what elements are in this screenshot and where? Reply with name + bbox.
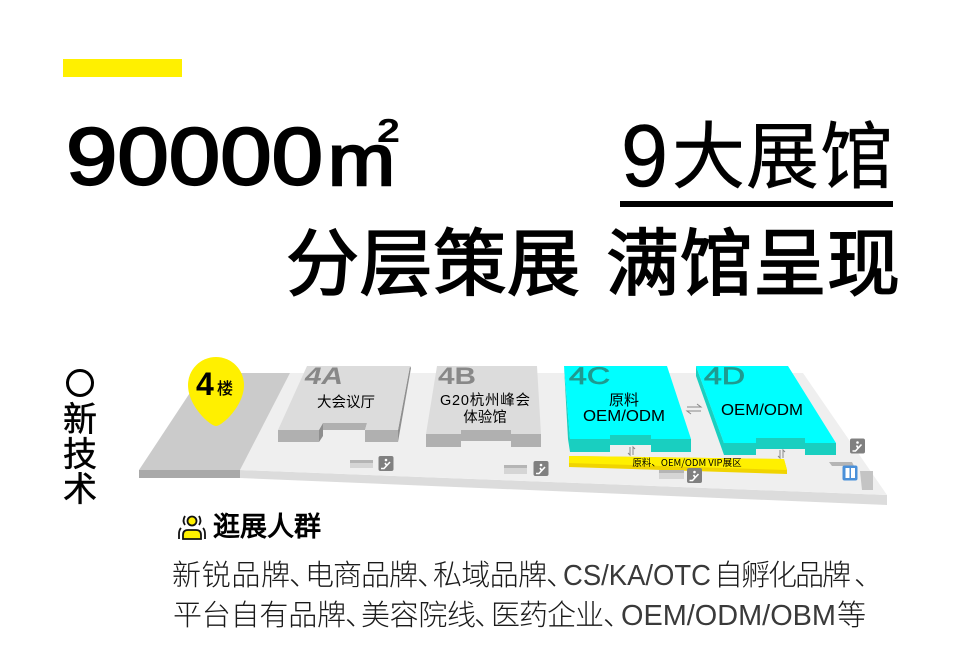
yellow accent bar	[63, 59, 182, 77]
hall 4D	[696, 363, 836, 455]
hall 4C	[564, 363, 691, 452]
audience list: 、	[603, 592, 632, 634]
audience list: 等	[837, 592, 866, 634]
hall 4C: 原料	[609, 389, 639, 410]
hall 4D: OEM/ODM	[721, 402, 803, 419]
floor plan: level 4	[139, 357, 887, 505]
location pin: 4th floor: 楼	[217, 375, 233, 399]
hall 4B: 4B	[438, 363, 476, 390]
link arrows between halls	[628, 404, 785, 458]
heading: 90000 square metres: 90000	[66, 112, 323, 202]
hall 4A: 4A	[304, 363, 343, 390]
audience list	[172, 552, 883, 634]
elevator icon	[842, 466, 858, 480]
heading: 9 halls: 9	[621, 106, 668, 205]
heading: 90000 square metres: m	[328, 121, 395, 201]
audience list: 医药企业	[491, 592, 604, 634]
category marker: new technology	[63, 370, 97, 511]
audience list: 、	[417, 552, 446, 594]
heading: tiered exhibition, full-hall presentation	[286, 205, 900, 311]
audience list: 、	[474, 592, 503, 634]
hall 4C: 4C	[569, 363, 610, 390]
audience list: 美容院线	[361, 592, 476, 634]
audience list: 、	[546, 552, 575, 594]
location pin: 4th floor	[188, 357, 244, 426]
location pin: 4th floor: 4	[196, 366, 214, 402]
subheading: visitor groups: 逛展人群	[213, 505, 321, 544]
audience list: 、	[289, 552, 318, 594]
audience list: 新锐品牌	[172, 552, 290, 594]
audience list: OEM/ODM/OBM	[621, 600, 836, 632]
hall 4B	[426, 363, 541, 447]
heading: tiered exhibition, full-hall presentation: 满馆呈现	[606, 205, 900, 311]
audience list: 电商品牌	[305, 552, 418, 594]
hall 4D: 4D	[704, 363, 745, 390]
heading: 9 halls: 大展馆	[672, 98, 893, 204]
category marker: new technology: 技	[63, 427, 97, 476]
audience list: CS/KA/OTC	[563, 560, 711, 592]
heading: 90000 square metres	[66, 112, 400, 202]
floor slab	[240, 373, 887, 505]
audience list: 私域品牌	[433, 552, 547, 594]
VIP zone strip: 原料、OEM/ODM VIP展区	[632, 455, 742, 469]
audience list: 自孵化品牌	[714, 552, 851, 594]
VIP zone strip	[569, 455, 787, 474]
audience list: 、	[345, 592, 374, 634]
hall 4A	[278, 363, 411, 442]
icon: visitors	[179, 516, 205, 539]
hall 4B: G20杭州峰会	[440, 392, 530, 409]
hall 4B: 体验馆	[463, 406, 507, 427]
grey unavailable block	[139, 373, 290, 478]
stair bars	[350, 460, 873, 490]
audience list: 、	[854, 552, 883, 594]
audience list: 平台自有品牌	[173, 592, 346, 634]
heading: tiered exhibition, full-hall presentation: 分层策展	[286, 205, 580, 311]
hall 4C: OEM/ODM	[583, 408, 665, 425]
heading: 90000 square metres: 2	[377, 112, 400, 149]
heading underline	[620, 201, 893, 207]
category marker: new technology: 术	[63, 462, 97, 511]
escalator icons	[378, 438, 865, 483]
category marker: new technology: 新	[63, 392, 97, 441]
hall 4A: 大会议厅	[317, 391, 375, 412]
